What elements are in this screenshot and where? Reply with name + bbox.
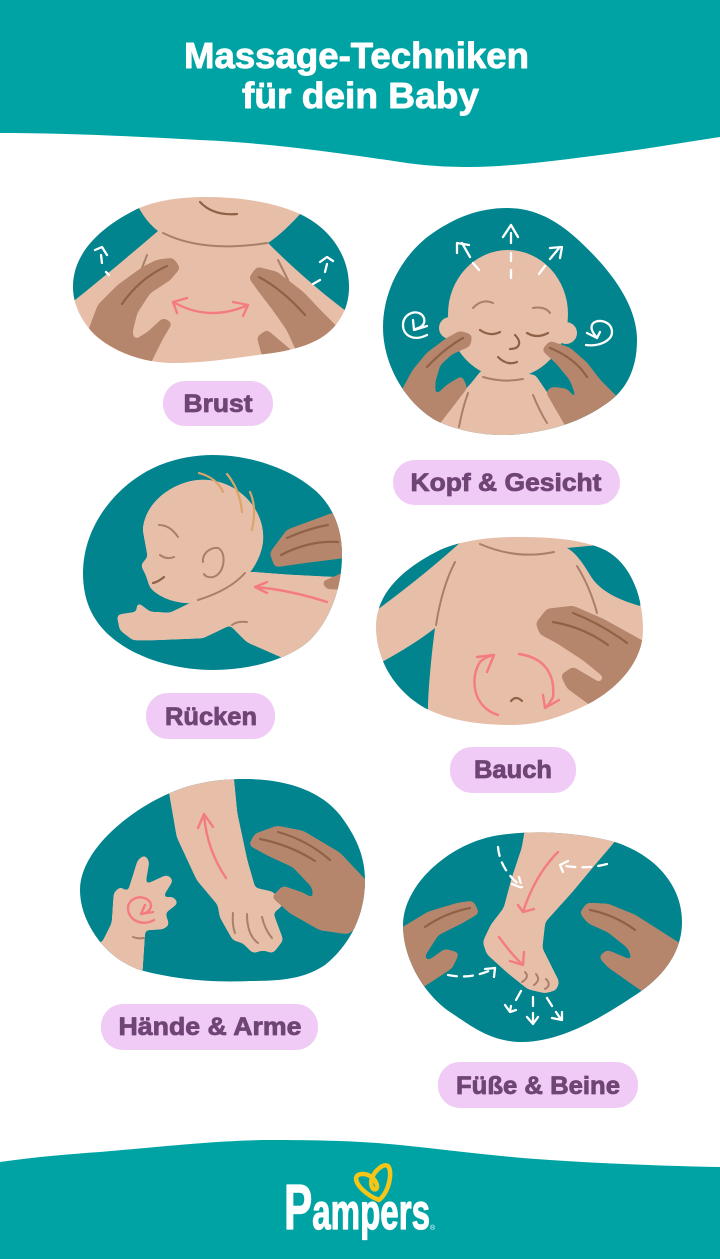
label: Füße & Beine <box>438 1062 638 1108</box>
label: Kopf & Gesicht <box>393 460 620 505</box>
label: Kopf & Gesicht: Kopf & Gesicht <box>410 469 602 497</box>
illustration: head massage <box>383 208 637 435</box>
label: Bauch: Bauch <box>474 756 552 784</box>
title <box>184 35 529 116</box>
label: Rücken: Rücken <box>165 703 257 731</box>
panel: Brust <box>73 197 349 426</box>
title: für dein Baby <box>242 75 479 116</box>
label: Bauch <box>450 747 576 793</box>
illustration: foot and leg massage <box>403 832 682 1042</box>
footer banner <box>0 1140 720 1259</box>
illustration: back massage <box>83 455 342 670</box>
registered mark: ® <box>430 1224 436 1232</box>
wordmark: Pampers <box>284 1171 430 1243</box>
label: Füße & Beine: Füße & Beine <box>456 1072 620 1100</box>
icon: heart <box>356 1165 390 1200</box>
panel: Rücken <box>75 450 350 739</box>
panel: Kopf & Gesicht <box>375 200 645 505</box>
panel: Bauch <box>365 530 650 793</box>
panel: Hände & Arme <box>75 772 370 1050</box>
Pampers logo <box>284 1165 436 1243</box>
title: Massage-Techniken <box>184 35 529 76</box>
label: Brust <box>163 381 273 426</box>
label: Hände & Arme <box>101 1004 318 1050</box>
label: Hände & Arme: Hände & Arme <box>118 1013 302 1041</box>
illustration: arm and hand massage <box>75 772 370 985</box>
illustration: chest massage <box>73 197 349 363</box>
label: Brust: Brust <box>184 390 253 418</box>
label: Rücken <box>146 693 275 739</box>
header banner <box>0 0 720 167</box>
illustration: tummy massage <box>376 537 643 725</box>
panel: Füße & Beine <box>395 825 690 1108</box>
